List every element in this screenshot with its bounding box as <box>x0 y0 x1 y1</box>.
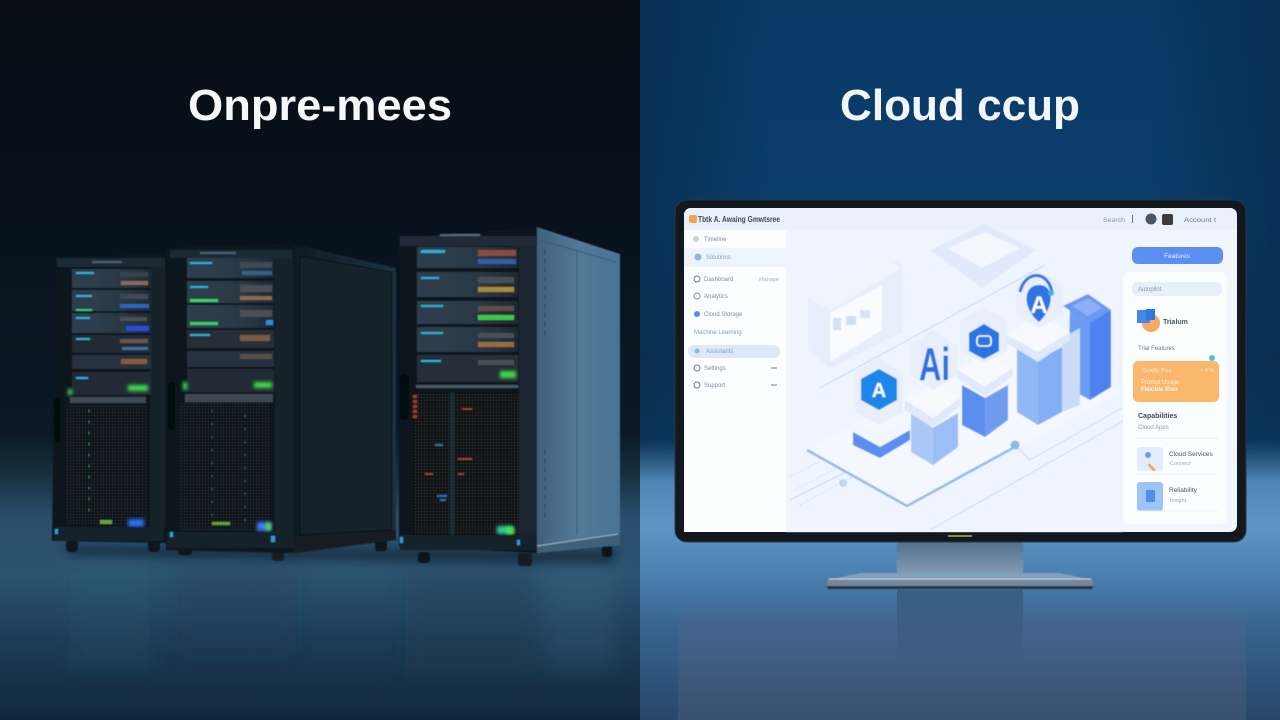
right panel vignette <box>640 0 1280 428</box>
list item 2 <box>1137 482 1198 511</box>
sidebar <box>684 230 786 532</box>
sidebar: Settings <box>704 366 726 372</box>
left panel background <box>0 0 640 720</box>
faded tile <box>930 224 1036 288</box>
monitor logo <box>948 535 972 537</box>
sidebar: Solutions <box>706 255 731 261</box>
monitor screen <box>684 208 1237 532</box>
monitor stand <box>827 540 1093 589</box>
column B <box>905 330 960 465</box>
monitor stand reflection <box>897 590 1023 660</box>
highlight card <box>1133 355 1219 402</box>
search field <box>1132 282 1222 296</box>
highlight card: Prompt Usage <box>1141 380 1180 386</box>
server racks illustration <box>52 227 620 566</box>
action button <box>1132 247 1223 264</box>
sidebar: Assistants <box>706 349 733 355</box>
desktop monitor <box>675 200 1246 589</box>
app header: Tbtk A. Awaing Gmwtsree <box>698 215 780 224</box>
column C <box>957 307 1013 437</box>
sidebar: Manage <box>759 277 779 283</box>
column B: Ai <box>919 338 950 390</box>
isometric illustration <box>786 224 1125 532</box>
list heading <box>1138 413 1177 431</box>
logo tile: Trialum <box>1163 319 1188 326</box>
title: on-premises: Onpre-mees <box>188 81 452 130</box>
server rack 2 <box>166 243 396 561</box>
right panel background <box>640 0 1280 720</box>
sidebar: Cloud Storage <box>704 312 743 318</box>
search field: Autopilot <box>1138 287 1162 293</box>
platform <box>807 335 1122 506</box>
app header: Search <box>1103 217 1125 224</box>
server rack 1 <box>52 253 168 552</box>
sidebar: Timeline <box>704 237 727 243</box>
list heading: Cloud Apps <box>1138 425 1169 431</box>
title: cloud: Cloud ccup <box>840 81 1080 130</box>
sidebar: Analytics <box>704 294 728 300</box>
right side panel <box>1123 247 1227 524</box>
app header <box>684 208 1237 230</box>
right side panel: Trial Features <box>1138 346 1175 352</box>
list item 2: Insight <box>1170 498 1187 504</box>
highlight card: + 4 % <box>1200 368 1214 374</box>
monitor bezel <box>675 200 1246 542</box>
list item 2: Reliability <box>1169 487 1198 494</box>
highlight card: Flexible Plan <box>1141 387 1178 393</box>
logo tile <box>1137 309 1188 332</box>
sidebar: Machine Learning <box>694 330 742 336</box>
app header: Account t <box>1184 217 1216 224</box>
floor reflections: server racks <box>70 560 615 675</box>
list item 1: Cloud Services <box>1169 451 1213 458</box>
highlight card: Quality Plus <box>1142 368 1172 374</box>
back blue block <box>1063 294 1111 400</box>
list item 1 <box>1137 447 1213 471</box>
sidebar: Dashboard <box>704 277 733 283</box>
column A <box>853 358 910 458</box>
list heading: Capabilities <box>1138 413 1177 420</box>
action button: Features <box>1164 253 1191 260</box>
list item 1: Connect <box>1170 461 1191 467</box>
column D <box>1007 270 1080 425</box>
sidebar: Support <box>704 383 725 389</box>
floor reflection: monitor <box>678 596 1246 720</box>
floor shadow under racks <box>62 546 618 564</box>
column A: A <box>872 380 886 402</box>
server rack 3 <box>399 227 620 566</box>
column D: A <box>1030 292 1048 319</box>
faded server box <box>808 255 902 368</box>
